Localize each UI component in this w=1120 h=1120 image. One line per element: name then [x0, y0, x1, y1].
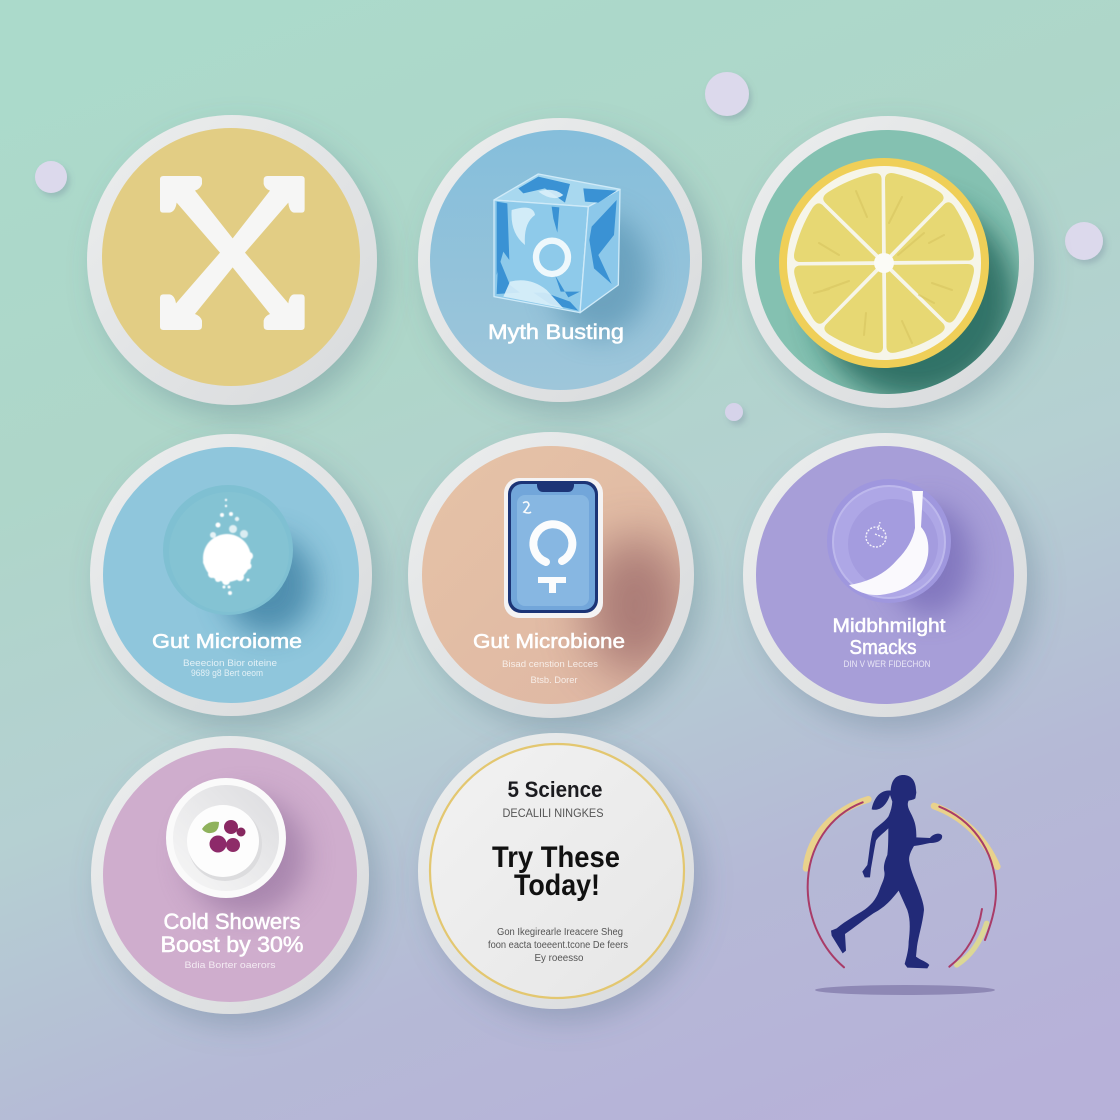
body text line three: Ey roeesso — [534, 953, 584, 964]
icon: crossed arrows — [160, 176, 305, 330]
caption: Bdia Borter oaerors — [184, 960, 276, 970]
heading: Gut Microiome: Gut Microiome — [152, 631, 302, 653]
panel: lemon coaster — [742, 116, 1034, 408]
caption: Beeecion Bior oiteine — [183, 658, 277, 668]
icon: banana plate — [827, 479, 951, 603]
panel: white try these today coaster — [418, 733, 694, 1009]
heading: Gut Microbione: Gut Microbione — [473, 631, 625, 653]
cube shadow — [550, 213, 650, 337]
caption: DIN V WER FIDECHON — [844, 659, 930, 669]
panel: peach phone coaster — [408, 432, 694, 718]
caption: Bisad censtion Lecces — [502, 659, 599, 669]
runner ground shadow — [815, 985, 995, 995]
disc shadow — [888, 504, 972, 616]
heading: 5 Science: 5 Science — [508, 777, 602, 802]
decorative bubble small — [725, 403, 743, 421]
plate shadow — [186, 796, 306, 916]
heading line two: Boost by 30%: Boost by 30% — [160, 932, 304, 957]
lemon shadow — [815, 200, 1015, 400]
heading line two: Smacks: Smacks — [850, 637, 916, 659]
body text line two: foon eacta toeeent.tcone De feers — [488, 940, 628, 951]
subheading: DECALILI NINGKES — [502, 806, 604, 820]
decorative bubble top — [705, 72, 749, 116]
illustration: runner with arcs — [806, 775, 997, 968]
icon: fizzing tablet — [163, 485, 293, 615]
icon: lemon slice — [779, 158, 989, 368]
phone shadow — [585, 535, 685, 675]
icon: phone — [504, 478, 603, 618]
heading: Myth Busting: Myth Busting — [488, 321, 624, 344]
caption line two: Btsb. Dorer — [530, 675, 578, 685]
icon: yogurt bowl with berries — [166, 778, 286, 898]
disc shadow — [222, 535, 314, 635]
panel: blue microbiome coaster — [90, 434, 372, 716]
panel: purple snacks coaster — [743, 433, 1027, 717]
decorative bubble left — [35, 161, 67, 193]
runner silhouette — [831, 775, 942, 968]
heading: Today: Today! — [514, 869, 600, 902]
decorative bubble right — [1065, 222, 1103, 260]
panel: myth busting coaster — [418, 118, 702, 402]
panel: pink bowl coaster — [91, 736, 369, 1014]
arcs — [806, 799, 997, 967]
heading: Cold Showers: Cold Showers — [164, 909, 300, 934]
icon: ice cube — [494, 174, 620, 313]
panel: yellow arrows coaster — [87, 115, 377, 405]
body text line one: Gon Ikegirearle Ireacere Sheg — [497, 927, 623, 938]
caption line two: 9689 g8 Bert oeom — [191, 668, 263, 678]
heading: Midbhmilght: Midbhmilght — [832, 616, 946, 637]
heading: Try These: Try These — [492, 841, 620, 874]
